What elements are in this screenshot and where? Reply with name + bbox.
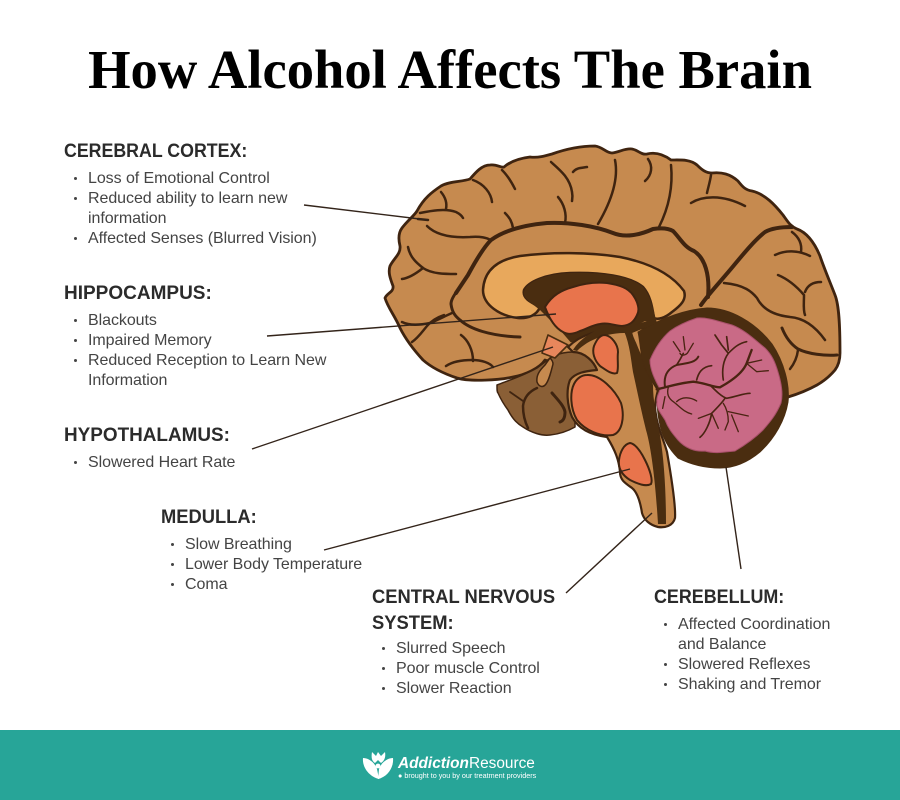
text block: cerebral cortex: Loss of Emotional Control: [88, 170, 270, 187]
text block: medulla: Slow Breathing: [185, 536, 292, 553]
text block: cerebellum: Affected Coordination: [678, 616, 830, 633]
brown midbrain mass: [497, 352, 597, 435]
text block: cerebellum: Shaking and Tremor: [678, 676, 821, 693]
cerebral aqueduct: [624, 330, 666, 524]
text block: hypothalamus: [64, 425, 235, 471]
mammillary oval: [593, 335, 618, 373]
text block: cerebral cortex: [64, 141, 317, 247]
text block: cerebral cortex: information: [88, 210, 166, 227]
lower tan tissue behind stem: [560, 325, 660, 400]
text block: medulla: MEDULLA:: [161, 507, 257, 528]
cerebellum veins: [657, 335, 768, 437]
text block: cerebellum: and Balance: [678, 636, 766, 653]
text block: central nervous system: CENTRAL NERVOUS: [372, 587, 555, 608]
text block: central nervous system: Slurred Speech: [396, 640, 505, 657]
text block: hypothalamus: Slowered Heart Rate: [88, 454, 235, 471]
text block: hippocampus: [64, 283, 326, 389]
title: How Alcohol Affects The Brain: [88, 39, 812, 100]
text block: medulla: Coma: [185, 576, 227, 593]
text block: central nervous system: Poor muscle Control: [396, 660, 540, 677]
midbrain creases: [510, 388, 565, 428]
brainstem: [568, 328, 675, 527]
text block: cerebral cortex: Affected Senses (Blurred Vision): [88, 230, 317, 247]
text block: cerebral cortex: CEREBRAL CORTEX:: [64, 141, 247, 162]
corpus callosum: [483, 253, 685, 319]
wordmark: AddictionResource: [397, 755, 535, 772]
leader lines: [252, 205, 741, 593]
medulla oval: [619, 443, 652, 485]
text block: cerebral cortex: Reduced ability to learn new: [88, 190, 287, 207]
pons oval: [571, 375, 623, 435]
text block: medulla: Lower Body Temperature: [185, 556, 362, 573]
text block: hippocampus: Impaired Memory: [88, 332, 212, 349]
light tan nub: [537, 358, 553, 386]
text block: central nervous system: [372, 587, 555, 697]
cerebellum dark shell: [638, 308, 788, 468]
cerebrum outline: [385, 146, 840, 400]
text block: hippocampus: Information: [88, 372, 167, 389]
text block: cerebellum: CEREBELLUM:: [654, 587, 784, 608]
text block: medulla: [161, 507, 362, 593]
sulci: cortex folds: [402, 159, 837, 369]
text block: central nervous system: Slower Reaction: [396, 680, 512, 697]
ventricle (dark): [524, 273, 657, 345]
text block: cerebellum: Slowered Reflexes: [678, 656, 810, 673]
text block: cerebellum: [654, 587, 830, 693]
text block: hippocampus: HIPPOCAMPUS:: [64, 283, 212, 304]
text block: hypothalamus: HYPOTHALAMUS:: [64, 425, 230, 446]
hypothalamus: [542, 335, 568, 358]
icon: flower: [363, 752, 393, 779]
cerebellum pink: [650, 318, 782, 453]
dark band under thalamus: [573, 320, 657, 351]
footer band: [0, 730, 900, 800]
text block: central nervous system: SYSTEM:: [372, 613, 454, 634]
text block: hippocampus: Blackouts: [88, 312, 157, 329]
logo: Addiction Resource: [362, 752, 537, 780]
thalamus: [545, 283, 638, 334]
tagline: ● brought to you by our treatment providers: [398, 771, 537, 780]
text block: hippocampus: Reduced Reception to Learn New: [88, 352, 326, 369]
